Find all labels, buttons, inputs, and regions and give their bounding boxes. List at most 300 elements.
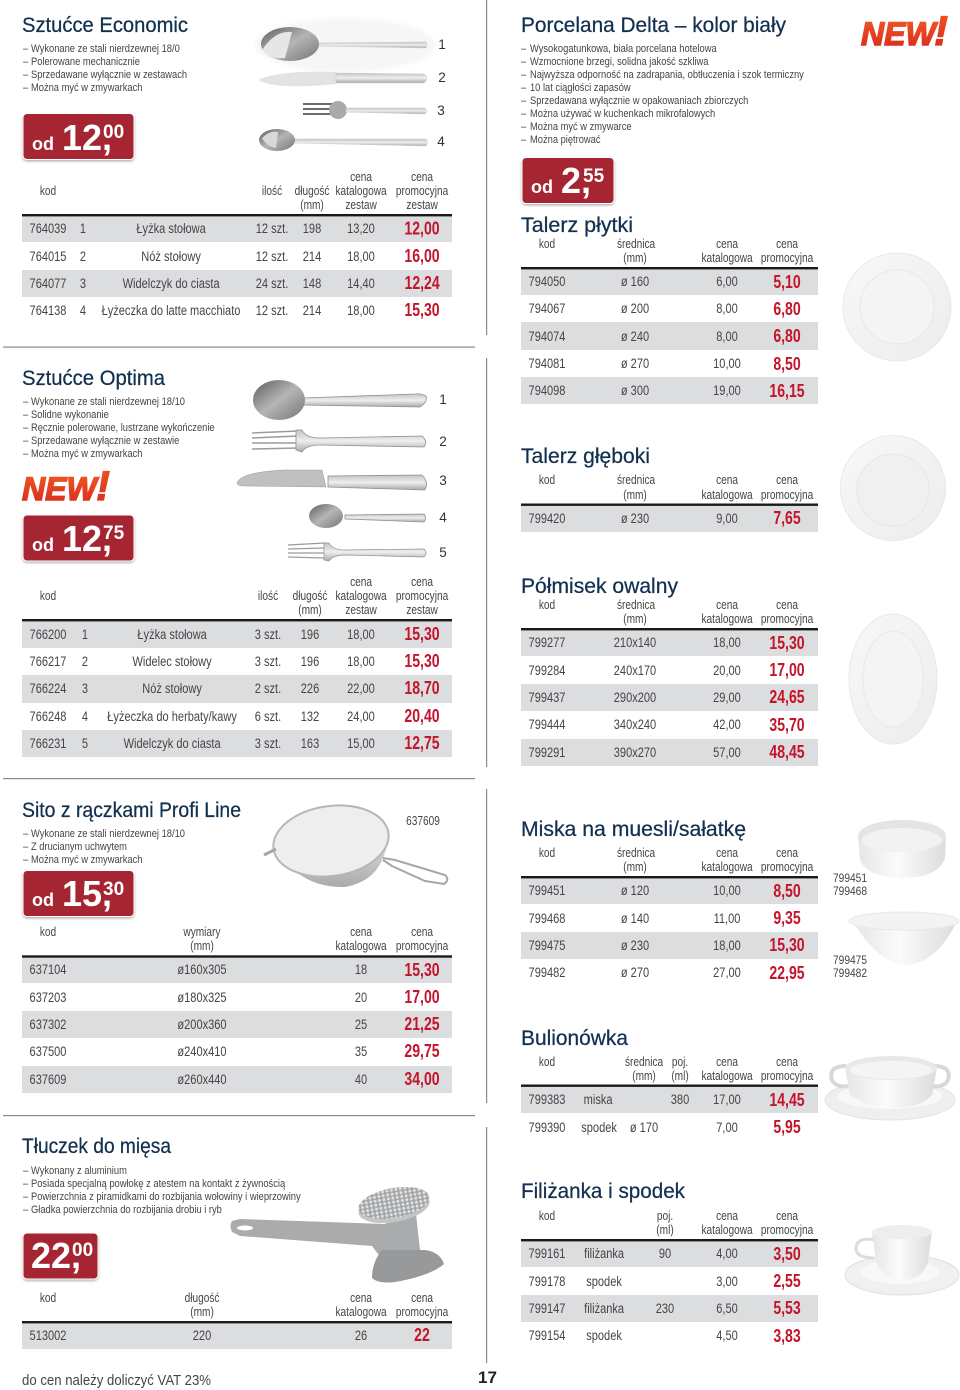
table: 390x270: [614, 745, 656, 760]
price badge: 22,: [31, 1235, 81, 1276]
NEW logo: [22, 462, 110, 509]
table: ø 170: [630, 1120, 658, 1135]
table: Economic: 764138: [30, 303, 66, 318]
table: Economic: 16,00: [404, 246, 440, 267]
table: 799277: [529, 635, 565, 650]
price badge: 00: [72, 1240, 93, 1261]
table: Tłuczek: cena: [411, 1292, 434, 1305]
table: 5,10: [773, 272, 801, 293]
table: 799284: [529, 663, 565, 678]
table: średnica: [617, 599, 656, 612]
table: Economic: Widelczyk do ciasta: [123, 276, 221, 291]
table: 8,50: [773, 881, 801, 902]
table: 799437: [529, 690, 565, 705]
feature list: –: [23, 1204, 28, 1216]
table: ø 160: [621, 274, 649, 289]
panel: Bulionówka: [521, 1027, 955, 1138]
table: 90: [659, 1246, 671, 1261]
table: Economic: cena: [411, 171, 434, 184]
table: 799390: [529, 1120, 565, 1135]
table: Optima: 3 szt.: [255, 627, 281, 642]
table: Tłuczek: [22, 1292, 452, 1349]
feature list: Wykonane ze stali nierdzewnej 18/0: [31, 43, 180, 55]
NEW logo: NEW: [22, 471, 99, 507]
heading: Sztućce Optima: [22, 367, 165, 390]
feature list: Można piętrować: [530, 134, 601, 146]
table: 17,00: [713, 1092, 741, 1107]
table: 17,00: [769, 660, 805, 681]
feature list: –: [23, 435, 28, 447]
table: Sito: 18: [355, 962, 367, 977]
table: Sito: (mm): [190, 940, 214, 953]
table: 6,50: [716, 1301, 738, 1316]
table: (mm): [632, 1070, 656, 1083]
table: 15,30: [769, 935, 805, 956]
panel: Porcelana Delta: [521, 7, 948, 204]
table: Economic: 198: [303, 221, 321, 236]
table: Economic: promocyjna: [396, 185, 449, 198]
table: Sito: ø160x305: [177, 962, 227, 977]
table: Sito: promocyjna: [396, 940, 449, 953]
heading: Tłuczek do mięsa: [22, 1135, 171, 1158]
table: Tłuczek: 26: [355, 1328, 367, 1343]
feature list: Sprzedawana wyłącznie w opakowaniach zbiorczych: [530, 95, 748, 107]
table: 794098: [529, 383, 565, 398]
table: Sito: wymiary: [182, 926, 221, 939]
table: cena: [776, 1210, 799, 1223]
price badge: od: [32, 134, 54, 154]
table: Sito: 17,00: [404, 987, 440, 1008]
price badge: 00: [103, 122, 124, 143]
table: Optima: 196: [301, 654, 319, 669]
table: katalogowa: [701, 861, 753, 874]
bowl code labels: [833, 872, 867, 980]
feature list: Wykonane ze stali nierdzewnej 18/10: [31, 828, 185, 840]
feature list: –: [23, 409, 28, 421]
table: Sito: ø260x440: [177, 1072, 227, 1087]
table: Economic: 764015: [30, 249, 66, 264]
table: ø 300: [621, 383, 649, 398]
table: kod: [539, 1210, 555, 1223]
table: ø 270: [621, 965, 649, 980]
price badge: 12,: [62, 518, 112, 559]
table: Optima: 766217: [30, 654, 66, 669]
feature list: Można myć w zmywarkach: [31, 82, 142, 94]
table: 10,00: [713, 883, 741, 898]
table: 380: [671, 1092, 689, 1107]
panel: Półmisek owalny: [521, 575, 937, 766]
table: 240x170: [614, 663, 656, 678]
feature list: [23, 1165, 301, 1216]
heading: Sito z rączkami Profi Line: [22, 799, 241, 822]
panel: Filiżanka i spodek: [521, 1180, 959, 1347]
table: 794081: [529, 356, 565, 371]
bowl code labels: 799482: [833, 967, 867, 980]
photo: sieve: [264, 798, 447, 887]
table: Tłuczek: 513002: [30, 1328, 66, 1343]
table: 799468: [529, 911, 565, 926]
table: 3,00: [716, 1274, 738, 1289]
price badge: 30: [103, 879, 124, 900]
table: 10,00: [713, 356, 741, 371]
table: Optima: 15,30: [404, 651, 440, 672]
feature list: Wzmocnione brzegi, solidna jakość szkliwa: [530, 56, 709, 68]
item numbers: 1: [439, 392, 447, 407]
table: (mm): [623, 252, 647, 265]
table: kod: [539, 238, 555, 251]
table: Optima: 18,00: [347, 654, 375, 669]
table: kod: [539, 474, 555, 487]
table: Sito: ø240x410: [177, 1044, 227, 1059]
table: Optima: ilość: [258, 590, 278, 603]
table: 18,00: [713, 938, 741, 953]
table: promocyjna: [761, 489, 814, 502]
table: filiżanka: [584, 1246, 625, 1261]
panel: Tłuczek do mięsa: [22, 1135, 452, 1349]
item numbers: 2: [438, 70, 446, 85]
table: Optima: Nóż stołowy: [142, 681, 202, 696]
table: Optima: kod: [40, 590, 56, 603]
table: Sito: 29,75: [404, 1041, 440, 1062]
table: poj.: [672, 1056, 688, 1069]
item numbers: 4: [437, 134, 445, 149]
table: 6,00: [716, 274, 738, 289]
table: ø 200: [621, 301, 649, 316]
table: Economic: 12,00: [404, 219, 440, 239]
feature list: Ręcznie polerowane, lustrzane wykończenie: [31, 422, 215, 434]
table: 230: [656, 1301, 674, 1316]
table: Optima: 766248: [30, 709, 66, 724]
table: [521, 599, 818, 766]
table: 340x240: [614, 717, 656, 732]
bowl code labels: 799451: [833, 872, 867, 885]
table: średnica: [625, 1056, 664, 1069]
panel: Sztućce Optima: [22, 367, 452, 757]
table: Optima: 4: [82, 709, 88, 724]
table: Tłuczek: promocyjna: [396, 1306, 449, 1319]
table: promocyjna: [761, 613, 814, 626]
feature list: Z drucianym uchwytem: [31, 841, 127, 853]
feature list: Wykonane ze stali nierdzewnej 18/10: [31, 396, 185, 408]
bowl code labels: 799468: [833, 885, 867, 898]
table: Optima: Łyżeczka do herbaty/kawy: [107, 709, 238, 724]
heading: Sztućce Economic: [22, 14, 188, 37]
table: Sito: 34,00: [404, 1069, 440, 1090]
table: Sito: 637302: [30, 1017, 66, 1032]
table: Optima: 5: [82, 736, 88, 751]
feature list: –: [23, 1178, 28, 1190]
feature list: Sprzedawane wyłącznie w zestawach: [31, 69, 187, 81]
table: 42,00: [713, 717, 741, 732]
table: cena: [716, 599, 739, 612]
table: 799291: [529, 745, 565, 760]
table: 24,65: [769, 687, 805, 708]
photo: oval platter: [849, 614, 937, 744]
table: 11,00: [714, 911, 740, 926]
table: Sito: 637104: [30, 962, 66, 977]
feature list: –: [521, 82, 526, 94]
feature list: [521, 43, 805, 146]
item numbers: 3: [439, 473, 447, 488]
heading: Bulionówka: [521, 1027, 628, 1050]
table: [521, 1056, 818, 1138]
table: 19,00: [713, 383, 741, 398]
feature list: –: [521, 95, 526, 107]
table: katalogowa: [701, 489, 753, 502]
feature list: Posiada specjalną powłokę z atestem na kontakt z żywnością: [31, 1178, 285, 1190]
feature list: –: [23, 828, 28, 840]
table: 3,50: [773, 1244, 801, 1265]
table: Optima: 766200: [30, 627, 66, 642]
price badge: [23, 515, 134, 561]
table: Sito: 637500: [30, 1044, 66, 1059]
table: 210x140: [614, 635, 656, 650]
table: Economic: (mm): [300, 199, 324, 212]
table: Sito: 21,25: [404, 1014, 440, 1035]
feature list: [23, 43, 187, 94]
table: cena: [776, 1056, 799, 1069]
table: Optima: zestaw: [345, 604, 378, 617]
photo: cup with saucer: [845, 1225, 959, 1295]
feature list: Sprzedawane wyłącznie w zestawie: [31, 435, 180, 447]
table: Economic: 15,30: [404, 300, 440, 321]
table: 6,80: [773, 326, 801, 347]
feature list: Można myć w zmywarce: [530, 121, 632, 133]
table: Sito: 40: [355, 1072, 367, 1087]
table: spodek: [586, 1274, 623, 1289]
table: średnica: [617, 238, 656, 251]
table: 799154: [529, 1328, 565, 1343]
table: kod: [539, 847, 555, 860]
table: Economic: 4: [80, 303, 86, 318]
table: Optima: długość: [293, 590, 328, 603]
table: cena: [716, 474, 739, 487]
table: Economic: 12 szt.: [256, 303, 288, 318]
table: 799147: [529, 1301, 565, 1316]
table: 290x200: [614, 690, 656, 705]
feature list: –: [23, 841, 28, 853]
table: [521, 238, 818, 404]
table: 794067: [529, 301, 565, 316]
table: Economic: 12 szt.: [256, 221, 288, 236]
table: Sito: 15,30: [404, 960, 440, 981]
table: 799178: [529, 1274, 565, 1289]
table: 8,00: [716, 301, 738, 316]
feature list: –: [23, 422, 28, 434]
table: Optima: 12,75: [404, 733, 440, 754]
table: katalogowa: [701, 1070, 753, 1083]
table: [521, 474, 818, 532]
table: ø 230: [621, 511, 649, 526]
table: Economic: 764039: [30, 221, 66, 236]
table: miska: [584, 1092, 613, 1107]
table: Tłuczek: długość: [185, 1292, 220, 1305]
price badge: 15,: [62, 873, 112, 914]
feature list: Można myć w zmywarkach: [31, 448, 142, 460]
heading: Talerz głęboki: [521, 445, 650, 468]
table: Sito: ø180x325: [177, 990, 227, 1005]
table: filiżanka: [584, 1301, 625, 1316]
table: Optima: 163: [301, 736, 319, 751]
table: 799475: [529, 938, 565, 953]
table: Economic: ilość: [262, 185, 282, 198]
table: 8,00: [716, 329, 738, 344]
table: 799451: [529, 883, 565, 898]
table: 9,00: [716, 511, 738, 526]
table: poj.: [657, 1210, 673, 1223]
feature list: –: [23, 1191, 28, 1203]
table: Economic: 2: [80, 249, 86, 264]
table: Sito: ø200x360: [177, 1017, 227, 1032]
table: katalogowa: [701, 252, 753, 265]
panel: Talerz głęboki: [521, 436, 946, 540]
table: Economic: Łyżeczka do latte macchiato: [102, 303, 240, 318]
table: Economic: 214: [303, 249, 321, 264]
table: Economic: [22, 171, 452, 321]
table: promocyjna: [761, 252, 814, 265]
table: 799444: [529, 717, 565, 732]
table: 22,95: [769, 963, 805, 984]
feature list: –: [23, 82, 28, 94]
table: Economic: 13,20: [347, 221, 375, 236]
table: promocyjna: [761, 1224, 814, 1237]
price badge: [23, 1233, 98, 1279]
table: 8,50: [773, 354, 801, 375]
table: cena: [716, 1056, 739, 1069]
heading: Porcelana Delta – kolor biały: [521, 14, 786, 37]
table: Sito: 25: [355, 1017, 367, 1032]
table: Tłuczek: (mm): [190, 1306, 214, 1319]
NEW logo: [861, 7, 948, 54]
table: średnica: [617, 474, 656, 487]
table: Tłuczek: 22: [414, 1325, 430, 1346]
heading: Półmisek owalny: [521, 575, 678, 598]
table: promocyjna: [761, 1070, 814, 1083]
table: Optima: 24,00: [347, 709, 375, 724]
feature list: Najwyższa odporność na zadrapania, obtłuczenia i szok termiczny: [530, 69, 805, 81]
table: Tłuczek: 220: [193, 1328, 211, 1343]
table: spodek: [586, 1328, 623, 1343]
table: Sito: kod: [40, 926, 56, 939]
table: Optima: zestaw: [406, 604, 439, 617]
photo: deep plate: [840, 436, 946, 540]
table: Economic: 12,24: [405, 273, 440, 294]
table: 16,15: [769, 381, 805, 402]
table: 18,00: [713, 635, 741, 650]
table: 6,80: [773, 299, 801, 320]
NEW logo: !: [96, 462, 110, 509]
feature list: –: [23, 448, 28, 460]
table: kod: [539, 1056, 555, 1069]
table: Optima: 18,00: [347, 627, 375, 642]
feature list: Wykonany z aluminium: [31, 1165, 127, 1177]
table: Tłuczek: cena: [350, 1292, 373, 1305]
table: Sito: 20: [355, 990, 367, 1005]
table: 794074: [529, 329, 565, 344]
table: Optima: 132: [301, 709, 319, 724]
table: Optima: 15,30: [404, 624, 440, 645]
table: Sito: 35: [355, 1044, 367, 1059]
table: Optima: 6 szt.: [255, 709, 281, 724]
panel: Talerz płytki: [521, 214, 951, 404]
table: (ml): [671, 1070, 689, 1083]
table: Economic: 18,00: [347, 249, 375, 264]
footer note: do cen należy doliczyć VAT 23%: [22, 1373, 211, 1389]
panel: Sito z rączkami Profi Line: [22, 798, 452, 1093]
table: 794050: [529, 274, 565, 289]
feature list: –: [23, 43, 28, 55]
table: 7,00: [716, 1120, 738, 1135]
feature list: Gładka powierzchnia do rozbijania drobiu i ryb: [31, 1204, 222, 1216]
table: Economic: zestaw: [345, 199, 378, 212]
table: (mm): [623, 613, 647, 626]
heading: Filiżanka i spodek: [521, 1180, 685, 1203]
table: Tłuczek: katalogowa: [335, 1306, 387, 1319]
table: 14,45: [769, 1090, 805, 1111]
price badge: od: [531, 177, 553, 197]
item numbers: [439, 392, 447, 560]
price badge: od: [32, 535, 54, 555]
table: ø 230: [621, 938, 649, 953]
table: 5,53: [773, 1298, 801, 1319]
heading: Miska na muesli/sałatkę: [521, 818, 746, 841]
feature list: –: [23, 56, 28, 68]
photo: flat plate: [843, 253, 951, 361]
table: 29,00: [713, 690, 741, 705]
table: Optima: 3: [82, 681, 88, 696]
table: Economic: Nóż stołowy: [141, 249, 201, 264]
table: Optima: 2: [82, 654, 88, 669]
table: 2,55: [773, 1271, 801, 1292]
table: 35,70: [769, 715, 805, 736]
table: Optima: 20,40: [404, 706, 440, 727]
table: 7,65: [773, 508, 801, 529]
table: [521, 847, 818, 984]
table: ø 240: [621, 329, 649, 344]
table: cena: [776, 238, 799, 251]
table: Optima: katalogowa: [335, 590, 387, 603]
price badge: 12,: [62, 117, 112, 158]
table: 799482: [529, 965, 565, 980]
table: promocyjna: [761, 861, 814, 874]
table: 5,95: [773, 1117, 801, 1138]
table: 9,35: [773, 908, 801, 929]
table: katalogowa: [701, 1224, 753, 1237]
item numbers: 1: [438, 37, 446, 52]
page dividers: [3, 0, 487, 1363]
NEW logo: NEW: [861, 16, 938, 52]
table: Optima: (mm): [298, 604, 322, 617]
bowl code labels: 799475: [833, 954, 867, 967]
table: Economic: długość: [295, 185, 330, 198]
table: [521, 1210, 818, 1347]
table: Optima: [22, 576, 452, 757]
table: Sito: cena: [350, 926, 373, 939]
feature list: –: [23, 396, 28, 408]
table: katalogowa: [701, 613, 753, 626]
table: Economic: 3: [80, 276, 86, 291]
item numbers: [437, 37, 446, 149]
price badge: [522, 158, 614, 204]
table: Economic: 1: [80, 221, 86, 236]
table: Optima: 2 szt.: [255, 681, 281, 696]
table: Economic: 18,00: [347, 303, 375, 318]
table: ø 270: [621, 356, 649, 371]
item numbers: 3: [437, 103, 445, 118]
table: cena: [776, 599, 799, 612]
table: Economic: cena: [350, 171, 373, 184]
page number: 17: [478, 1368, 497, 1387]
